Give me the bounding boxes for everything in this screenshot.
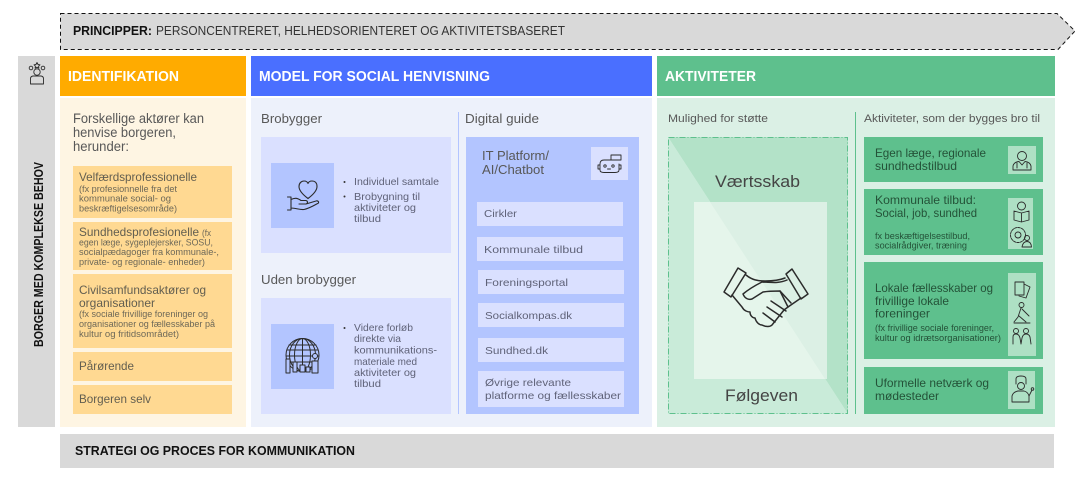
- banner: principper: PERSONCENTRERET, HELHEDSORIENTERET OG AKTIVITETSBASERET: [156, 23, 565, 38]
- box: velfærdsprofessionelle: [73, 166, 232, 218]
- card: kommunale tilbud: Kommunale tilbud:: [875, 193, 976, 207]
- box: borgeren selv: Borgeren selv: [79, 392, 151, 406]
- box: velfærdsprofessionelle: kommunale social- og: [79, 194, 171, 204]
- box: velfærdsprofessionelle: (fx profesionnelle fra det: [79, 184, 178, 194]
- card: uformelle netværk: mødesteder: [875, 389, 939, 403]
- panel header: identifikation: [60, 56, 246, 96]
- icon: volunteer: [1014, 302, 1030, 323]
- diagram: værtsskab og følgeven: [668, 137, 848, 414]
- card: egen læge: [864, 137, 1043, 182]
- panel header: model for social henvisning: MODEL FOR SOCIAL HENVISNING: [259, 69, 490, 85]
- list item: kommunale tilbud: [477, 237, 623, 261]
- panel: identifikation: [60, 98, 246, 427]
- banner: principper: PRINCIPPER:: [73, 23, 152, 38]
- box: velfærdsprofessionelle: Velfærdsprofessionelle: [79, 170, 197, 184]
- list item: kommunale tilbud: Kommunale tilbud: [484, 244, 583, 256]
- card: egen læge: sundhedstilbud: [875, 159, 957, 173]
- box: sundhedsprofesionelle: Sundhedsprofesionelle: [79, 225, 199, 239]
- box: pårørende: Pårørende: [79, 359, 134, 373]
- card: egen læge: Egen læge, regionale: [875, 146, 986, 160]
- card title: it platform: [482, 149, 550, 177]
- bullet list: uden brobygger: tilbud: [354, 378, 381, 390]
- card: uden brobygger: [261, 298, 451, 414]
- card: kommunale tilbud: fx beskæftigelsestilbud,: [875, 231, 970, 241]
- side bar: borger med komplekse behov: [18, 56, 55, 427]
- box: civilsamfundsaktører: Civilsamfundsaktører og: [79, 283, 206, 297]
- box: sundhedsprofesionelle: (fx: [202, 228, 212, 238]
- icon: globe with people: [286, 338, 319, 373]
- bullet list: uden brobygger: kommunikations-: [354, 344, 438, 356]
- banner: principper: [60, 14, 1075, 50]
- box: sundhedsprofesionelle: egen læge, sygeplejersker, SOSU,: [79, 238, 213, 248]
- panel header: aktiviteter: AKTIVITETER: [665, 69, 757, 85]
- icon: handshake: [724, 268, 808, 326]
- heading: mulighed for støtte: Mulighed for støtte: [668, 113, 768, 125]
- card title: it platform: IT Platform/: [482, 149, 550, 163]
- heading: aktiviteter der bygges bro til: Aktiviteter, som der bygges bro til: [864, 113, 1040, 125]
- icon: two people: [1013, 328, 1031, 344]
- panel header: aktiviteter: [657, 56, 1055, 96]
- list item: foreningsportal: [478, 270, 624, 294]
- box: civilsamfundsaktører: (fx sociale frivillige foreninger og: [79, 309, 208, 319]
- bullet list: uden brobygger: materiale med: [354, 356, 417, 368]
- intro text: henvise borgeren,: [73, 125, 176, 140]
- list item: foreningsportal: Foreningsportal: [485, 277, 568, 289]
- list item: cirkler: [477, 202, 623, 226]
- card: uformelle netværk: Uformelle netværk og: [875, 376, 989, 390]
- icon: reader: [1014, 202, 1029, 222]
- card title: it platform: AI/Chatbot: [482, 163, 545, 177]
- box: borgeren selv: [73, 385, 232, 414]
- icon: person with stars: [29, 62, 45, 84]
- card: lokale fællesskaber: Lokale fællesskaber og: [875, 281, 993, 295]
- intro text: [73, 111, 204, 154]
- side bar: borger med komplekse behov: BORGER MED KOMPLEKSE BEHOV: [31, 162, 46, 347]
- list item: øvrige: [478, 371, 624, 407]
- list item: cirkler: Cirkler: [484, 208, 518, 220]
- icon: doctor: [1013, 152, 1031, 170]
- box: sundhedsprofesionelle: [73, 222, 232, 270]
- bullet list: uden brobygger: Videre forløb: [354, 322, 413, 334]
- bullet list: brobygger: Brobygning til: [354, 191, 420, 203]
- list item: øvrige: platforme og fællesskaber: [485, 390, 622, 402]
- card: uformelle netværk: [864, 367, 1043, 414]
- banner: strategi og proces: [60, 434, 1054, 468]
- heading: uden brobygger: Uden brobygger: [261, 272, 357, 287]
- panel header: identifikation: IDENTIFIKATION: [68, 69, 179, 85]
- intro text: Forskellige aktører kan: [73, 111, 204, 126]
- box: civilsamfundsaktører: kultur og fritidsområdet): [79, 329, 179, 339]
- list item: sundhed.dk: Sundhed.dk: [485, 345, 549, 357]
- icon: chatbot: [591, 147, 628, 180]
- icon: cards: [1015, 282, 1030, 298]
- list item: socialkompas: [478, 303, 624, 327]
- icon: heart in hand: [288, 181, 319, 210]
- icon: cook: [1012, 376, 1034, 402]
- card: lokale fællesskaber: (fx frivillige sociale foreninger,: [875, 323, 994, 333]
- list item: sundhed.dk: [478, 338, 624, 362]
- bullet list: uden brobygger: direkte via: [354, 333, 401, 345]
- card: lokale fællesskaber: [864, 262, 1043, 359]
- card: lokale fællesskaber: kultur og idrætsorganisationer): [875, 333, 1001, 343]
- bullet list: brobygger: tilbud: [354, 213, 381, 225]
- banner: strategi og proces: STRATEGI OG PROCES FOR KOMMUNIKATION: [75, 443, 355, 458]
- icon: gear with people: [1010, 228, 1032, 247]
- panel: aktiviteter: [657, 98, 1055, 427]
- card: digital guide: [466, 137, 639, 414]
- card: lokale fællesskaber: foreninger: [875, 306, 930, 320]
- bullet list: uden brobygger: aktiviteter og: [354, 367, 416, 379]
- bullet list: brobygger: [344, 176, 439, 225]
- heading: digital guide: Digital guide: [465, 111, 539, 126]
- bullet list: brobygger: aktiviteter og: [354, 202, 416, 214]
- panel: model for social henvisning: [251, 98, 652, 427]
- panel header: model for social henvisning: [251, 56, 652, 96]
- box: velfærdsprofessionelle: beskræftigelsesområde): [79, 204, 177, 214]
- card: kommunale tilbud: Social, job, sundhed: [875, 206, 977, 220]
- box: civilsamfundsaktører: organisationer: [79, 296, 155, 310]
- bullet list: uden brobygger: [344, 322, 438, 390]
- box: pårørende: [73, 352, 232, 381]
- box: sundhedsprofesionelle: socialpædagoger fra kommunale-,: [79, 247, 219, 257]
- list item: socialkompas: Socialkompas.dk: [485, 310, 573, 322]
- card: brobygger: [261, 137, 451, 253]
- bullet list: brobygger: Individuel samtale: [354, 176, 439, 188]
- label: følgeven: Følgeven: [725, 387, 798, 405]
- box: civilsamfundsaktører: organisationer og fællesskaber på: [79, 319, 215, 329]
- box: sundhedsprofesionelle: private- og regionale- enheder): [79, 257, 205, 267]
- box: civilsamfundsaktører: [73, 274, 232, 348]
- label: værtsskab: Værtsskab: [715, 173, 800, 191]
- card: lokale fællesskaber: frivillige lokale: [875, 294, 949, 308]
- heading: brobygger: Brobygger: [261, 111, 323, 126]
- list item: øvrige: Øvrige relevante: [485, 377, 571, 389]
- intro text: herunder:: [73, 139, 129, 154]
- card: kommunale tilbud: socialrådgiver, træning: [875, 240, 967, 250]
- card: kommunale tilbud: [864, 189, 1043, 255]
